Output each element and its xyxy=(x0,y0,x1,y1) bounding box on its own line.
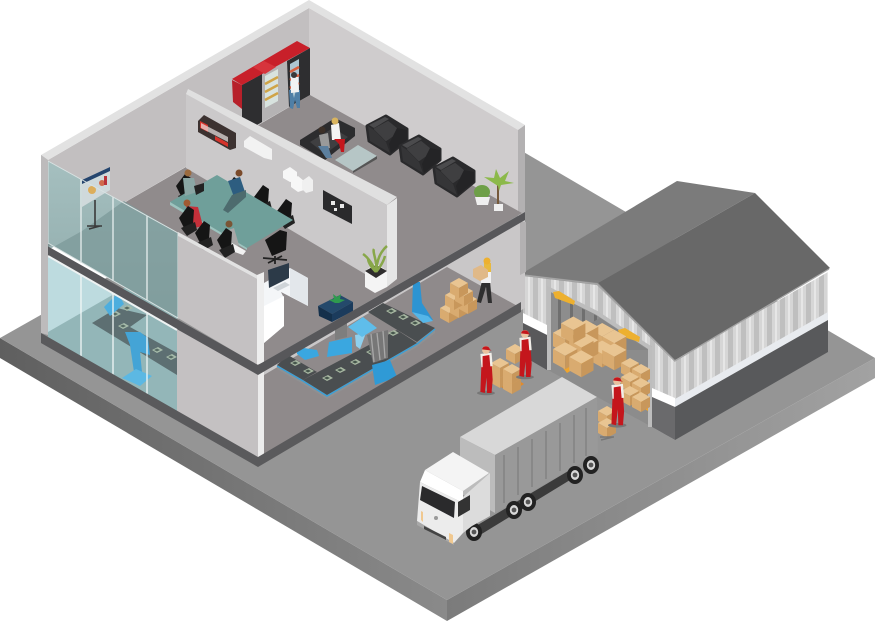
man in blue jacket xyxy=(223,170,246,213)
door frame xyxy=(549,289,650,427)
wheels xyxy=(466,456,599,541)
upper storey back walls xyxy=(41,0,525,247)
blue robot arm right xyxy=(412,282,433,323)
base band of building xyxy=(41,302,521,467)
blue packing machine xyxy=(327,317,397,385)
sofa with two people xyxy=(300,118,355,160)
small blue robot base xyxy=(297,347,319,360)
whiteboard on stand xyxy=(82,167,110,229)
near chairs xyxy=(179,206,197,236)
cargo box rear xyxy=(460,437,495,513)
warehouse building xyxy=(521,181,830,440)
conveyor behind glass xyxy=(92,305,177,375)
partition wall xyxy=(186,89,397,287)
warehouse interior xyxy=(548,288,652,427)
carton pile on lower floor xyxy=(440,278,477,323)
potted plants xyxy=(474,169,514,211)
person at vending machine xyxy=(289,72,300,109)
chassis xyxy=(476,470,570,535)
robot arm behind glass xyxy=(104,293,152,386)
upper glass facade xyxy=(48,161,178,318)
wall shelf xyxy=(198,115,236,150)
lower glass facade xyxy=(48,255,177,412)
lower front wall xyxy=(177,328,258,458)
yellow door light right xyxy=(618,328,640,342)
lower floor xyxy=(264,267,521,456)
upper front wall xyxy=(178,232,264,365)
notice board xyxy=(323,190,352,224)
glass table top xyxy=(170,175,293,248)
cab xyxy=(417,452,490,545)
reception desk xyxy=(264,263,308,343)
truck xyxy=(417,377,599,545)
left building edge xyxy=(41,155,48,335)
white band and dark base left of door xyxy=(523,313,547,370)
woman near side xyxy=(184,200,203,228)
lower conveyor line xyxy=(277,303,435,399)
air conditioner xyxy=(244,136,272,160)
main building lower storey xyxy=(177,220,526,460)
worker carrying carton xyxy=(473,258,492,303)
plant on white pedestal xyxy=(363,246,387,293)
cargo box side xyxy=(495,397,598,513)
upper floor xyxy=(48,95,522,365)
white cube shelves xyxy=(283,167,313,193)
warehouse long wall xyxy=(675,272,828,440)
woman left of table xyxy=(183,170,204,196)
worker with hand truck xyxy=(598,377,626,440)
seated man xyxy=(318,126,332,158)
man near side xyxy=(222,220,246,255)
workers with pallet xyxy=(477,330,534,395)
seated woman xyxy=(331,118,345,152)
pallet stack beside door xyxy=(621,358,650,412)
glass coffee table xyxy=(335,145,377,173)
vending machines xyxy=(232,41,310,134)
chairs behind table xyxy=(176,174,194,204)
cartons inside warehouse xyxy=(553,317,626,377)
light line under slab xyxy=(48,256,177,330)
warehouse roof xyxy=(521,181,830,361)
lower back wall xyxy=(258,220,525,460)
meeting table group xyxy=(170,170,295,264)
armchairs xyxy=(367,116,407,154)
swivel chair xyxy=(263,230,287,264)
navy box with plant xyxy=(318,294,353,322)
corner strip xyxy=(258,372,264,458)
cargo box top xyxy=(460,377,597,455)
end column xyxy=(520,222,526,275)
monitor xyxy=(268,263,290,291)
upper floor slab edge xyxy=(42,212,525,375)
warehouse gable wall xyxy=(523,276,675,440)
white band and dark base right of door xyxy=(652,388,675,440)
yellow door light left xyxy=(553,291,575,305)
